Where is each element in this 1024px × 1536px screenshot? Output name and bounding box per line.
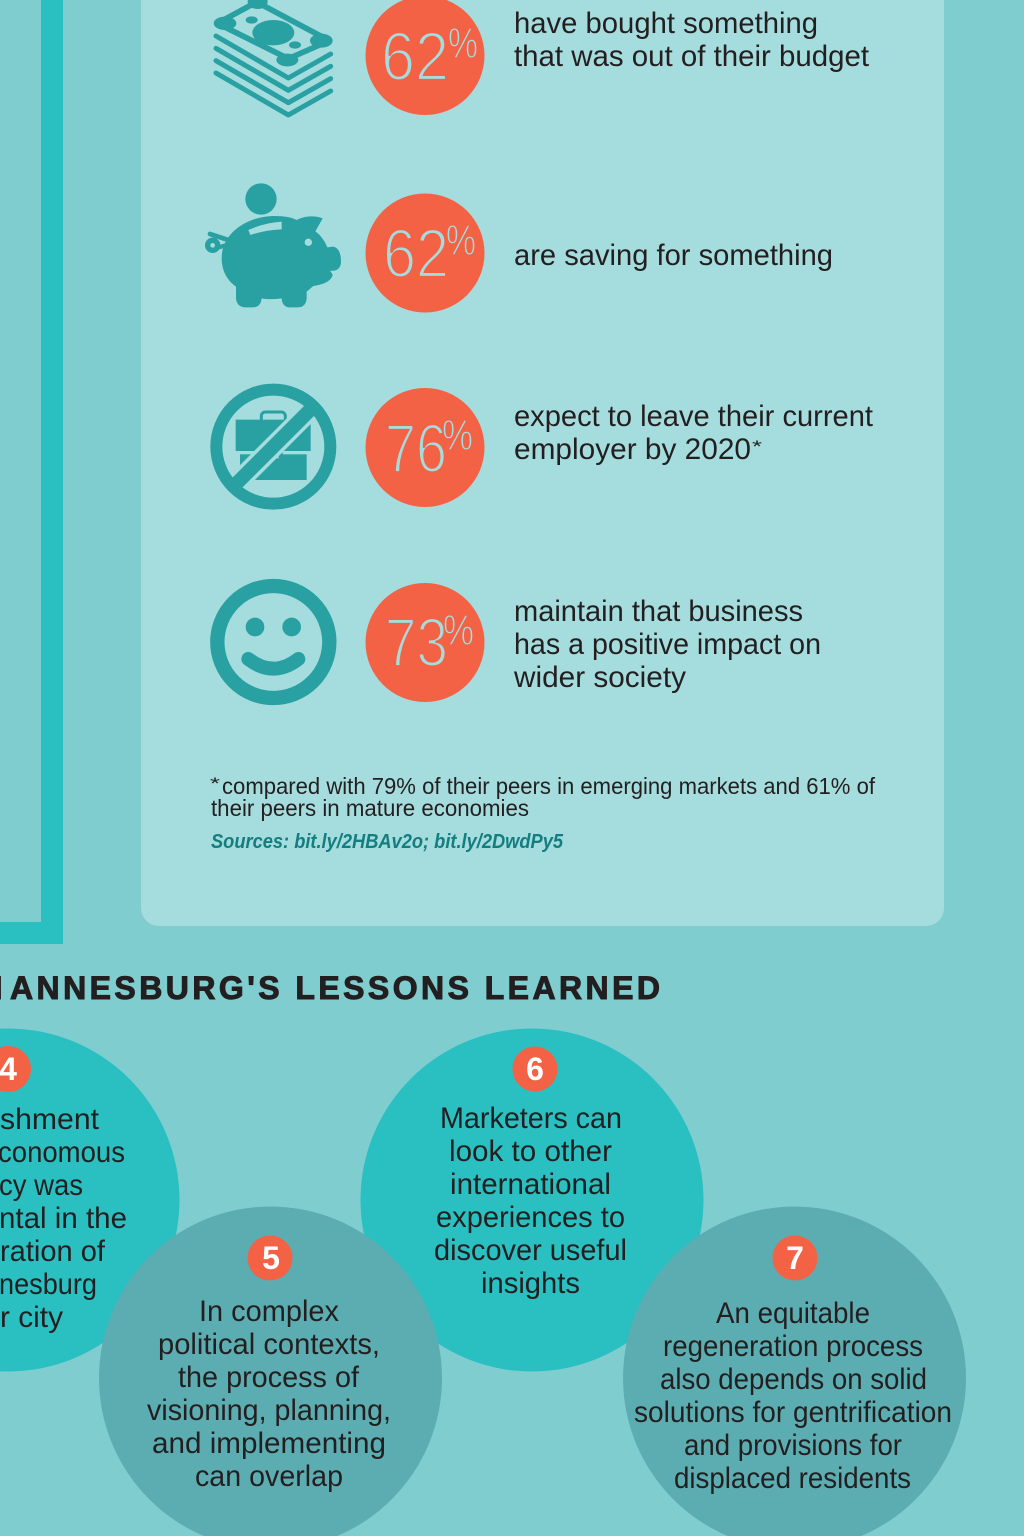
footnote: compared with 79% of their peers in emerging markets and 61% of xyxy=(222,773,876,799)
lesson 4 text: conomous xyxy=(0,1136,125,1169)
lesson 7 circle xyxy=(623,1206,966,1536)
lesson 4 text: ntal in the xyxy=(0,1202,127,1235)
stat badge: 62% budget: 62 xyxy=(381,18,449,95)
text: positive impact: has a positive impact on xyxy=(514,628,821,661)
text: bought out of budget: that was out of their budget xyxy=(514,40,870,73)
lesson 5 text: In complex xyxy=(199,1295,339,1328)
badge 5: 5 xyxy=(262,1240,280,1276)
lesson 4 text: cy was xyxy=(0,1169,83,1202)
stat badge: 76%: % xyxy=(442,412,473,460)
lesson 7 text: solutions for gentrification xyxy=(634,1396,952,1429)
footnote: * xyxy=(210,774,221,793)
badge 6: 6 xyxy=(526,1051,544,1087)
stat badge: 62% budget xyxy=(366,0,484,115)
stat badge: 73% xyxy=(366,583,484,702)
panel: millennial statistics xyxy=(141,0,944,926)
lesson 6 text: discover useful xyxy=(434,1234,627,1267)
stat badge: 73%: % xyxy=(443,607,474,655)
lesson 4 text: shment xyxy=(0,1103,100,1136)
frame: teal border of left panel xyxy=(0,0,63,944)
heading: lessons learned: ANNESBURG'S LESSONS LEARNED xyxy=(10,970,660,1006)
stat badge: 62% saving: 62 xyxy=(383,215,449,292)
lesson 7 text: regeneration process xyxy=(663,1330,923,1363)
text: leaving employer: employer by 2020 xyxy=(514,433,751,466)
lesson 6 text: Marketers can xyxy=(440,1102,622,1135)
lesson 4 text: nesburg xyxy=(0,1268,97,1301)
lesson 5 text: can overlap xyxy=(195,1460,343,1493)
stat badge: 62% saving xyxy=(366,194,484,312)
footnote xyxy=(210,773,876,821)
text: bought out of budget xyxy=(514,7,870,73)
lesson 5 text: the process of xyxy=(178,1361,360,1394)
lesson 7 text: An equitable xyxy=(716,1297,870,1330)
text: bought out of budget: have bought something xyxy=(514,7,818,40)
sources: Sources: bit.ly/2HBAv2o; bit.ly/2DwdPy5 xyxy=(211,831,564,853)
text: leaving employer: * xyxy=(752,437,763,456)
stat badge: 62% saving: % xyxy=(446,217,476,265)
icon: piggy bank xyxy=(208,183,341,307)
lesson 6 text: international xyxy=(450,1168,611,1201)
icon: stack of money xyxy=(214,0,333,115)
icon: crossed-out briefcase xyxy=(216,390,330,504)
stat badge: 76% xyxy=(366,388,484,507)
stat badge: 62% budget: % xyxy=(448,20,478,68)
text: positive impact xyxy=(513,595,821,694)
badge 5 xyxy=(248,1236,292,1280)
lesson 5 text: and implementing xyxy=(152,1427,386,1460)
lesson 7 text: displaced residents xyxy=(674,1462,911,1495)
lesson 6 text: look to other xyxy=(449,1135,612,1168)
lesson 6 text: insights xyxy=(481,1267,580,1300)
text: saving: are saving for something xyxy=(514,239,833,272)
stat badge: 73%: 73 xyxy=(385,604,448,681)
badge 6 xyxy=(512,1046,558,1092)
lesson 6 circle xyxy=(360,1028,704,1372)
lesson 6 text: experiences to xyxy=(436,1201,625,1234)
text: leaving employer: expect to leave their current xyxy=(514,400,874,433)
badge 7 xyxy=(772,1236,818,1280)
lesson 4 text: ration of xyxy=(0,1235,106,1268)
lesson 4 circle xyxy=(0,1028,180,1372)
lesson 7 text: and provisions for xyxy=(684,1429,902,1462)
footnote: their peers in mature economies xyxy=(211,795,529,821)
lesson 5 text xyxy=(147,1295,391,1493)
badge 7: 7 xyxy=(786,1240,804,1276)
lesson 5 text: political contexts, xyxy=(158,1328,380,1361)
text: positive impact: maintain that business xyxy=(514,595,803,628)
lesson 5 text: visioning, planning, xyxy=(147,1394,391,1427)
lesson 7 text xyxy=(634,1297,952,1495)
lesson 5 circle xyxy=(99,1206,442,1536)
badge 4 xyxy=(0,1046,31,1092)
text: leaving employer xyxy=(514,400,874,466)
text: positive impact: wider society xyxy=(513,661,686,694)
lesson 6 text xyxy=(434,1102,627,1300)
lesson 4 text xyxy=(0,1103,127,1334)
lesson 4 text: r city xyxy=(0,1301,63,1334)
lesson 7 text: also depends on solid xyxy=(660,1363,927,1396)
stat badge: 76%: 76 xyxy=(385,410,447,487)
icon: smiley face xyxy=(217,586,329,698)
